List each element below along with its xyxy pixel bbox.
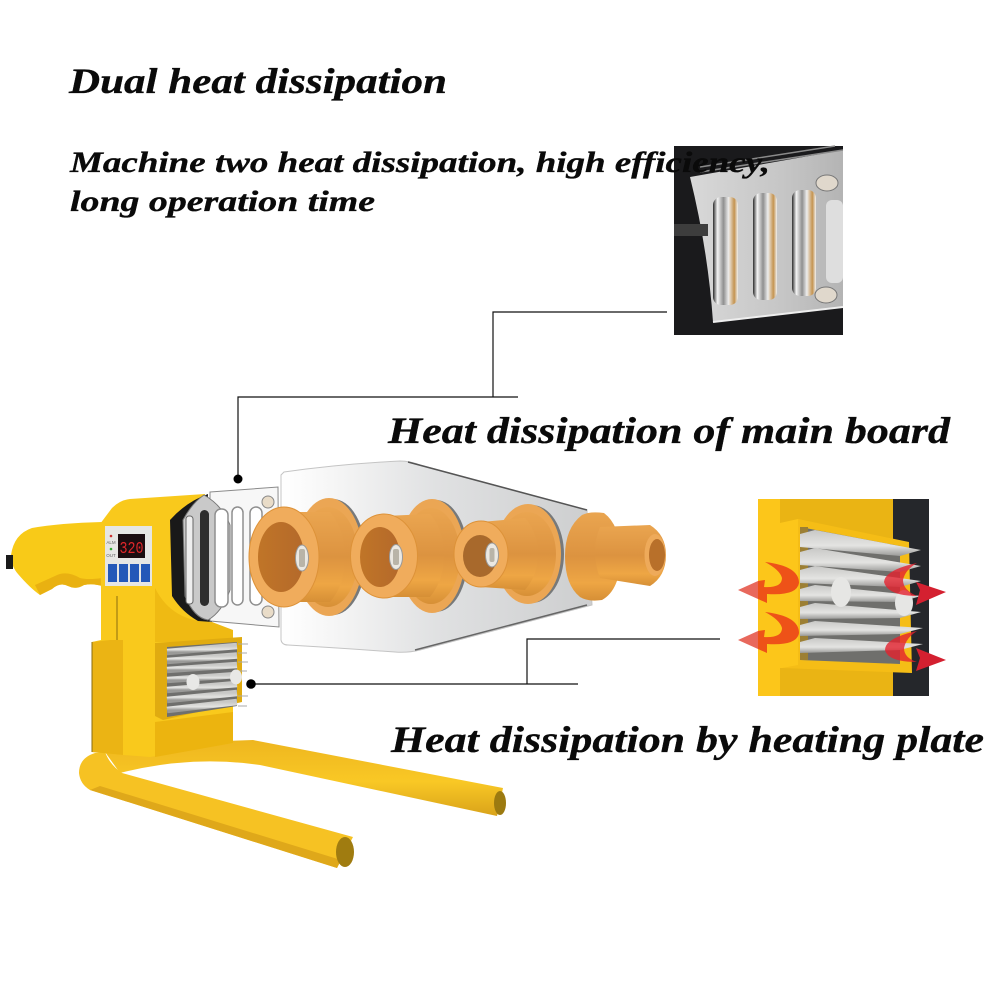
leader line: heating plate — [246, 639, 720, 689]
inset photo: main board vents — [674, 146, 843, 335]
stand tube — [79, 740, 506, 868]
arrows: right red — [884, 563, 917, 662]
arrows: left orange — [758, 562, 799, 653]
vent plate — [170, 487, 279, 627]
description text: Machine two heat dissipation, high efficiency, — [69, 146, 770, 179]
die 3 — [454, 504, 564, 604]
vent slots — [713, 190, 816, 305]
description text: long operation time — [70, 185, 375, 218]
fins — [800, 530, 923, 653]
control panel — [105, 526, 152, 586]
control panel: OUT — [106, 553, 116, 558]
inset photo: heating plate — [738, 499, 946, 696]
machine handle — [6, 522, 102, 595]
machine body — [92, 494, 248, 757]
description text — [69, 146, 770, 218]
die 1 — [249, 498, 366, 616]
control panel: 320 — [120, 540, 144, 559]
control panel: ALM — [106, 540, 116, 545]
heat sink — [155, 637, 248, 720]
die 2 — [350, 499, 468, 613]
heading: heating plate: Heat dissipation by heating plate — [390, 720, 984, 761]
arrowheads: right red — [916, 582, 946, 671]
heading: main board: Heat dissipation of main board — [387, 411, 951, 452]
die 4 — [565, 512, 666, 601]
title: Dual heat dissipation — [68, 61, 447, 101]
arrowheads: left pink — [738, 581, 758, 649]
leader line: main board — [234, 312, 667, 484]
heating plate with dies — [249, 461, 666, 652]
